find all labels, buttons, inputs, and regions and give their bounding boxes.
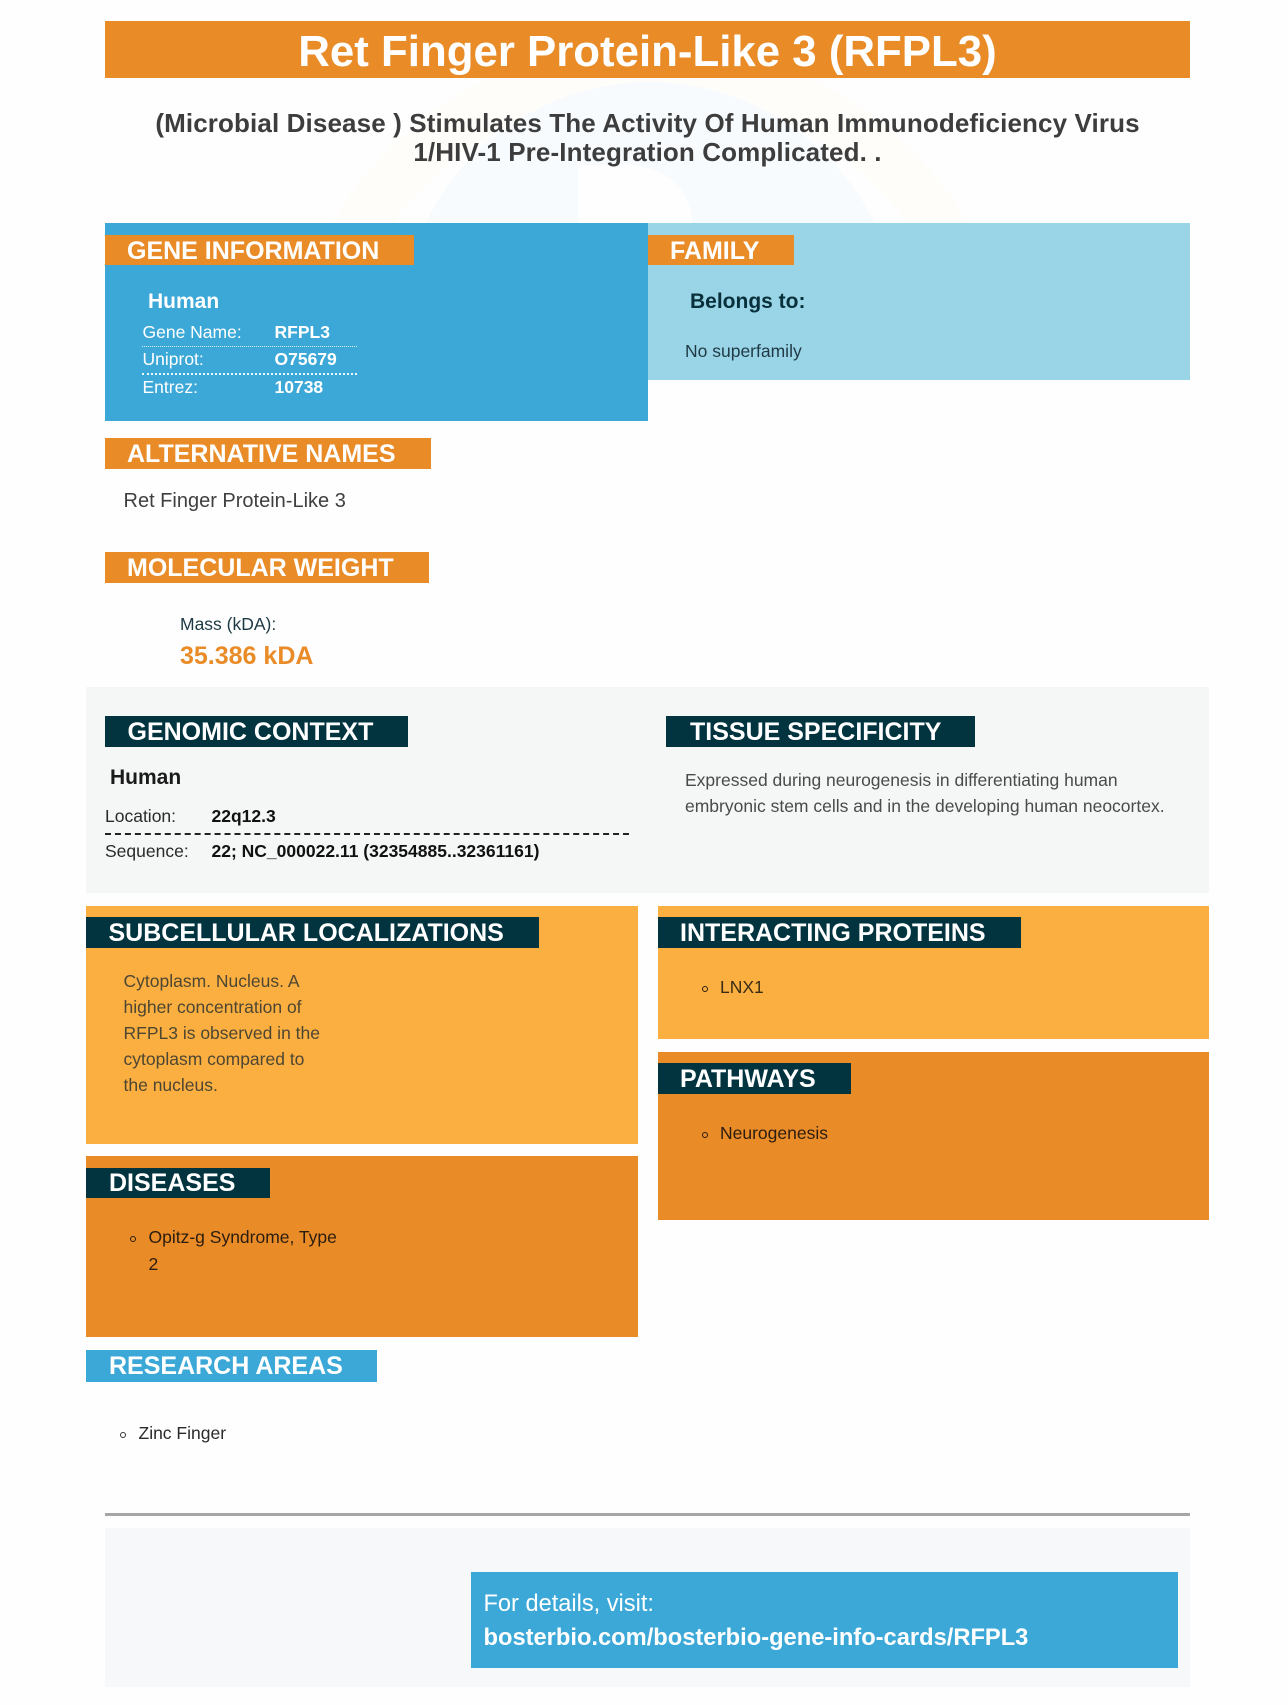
location value: 22q12.3 <box>212 806 276 826</box>
callout: details link: For details, visit: <box>484 1591 654 1617</box>
panel: pathways <box>658 1052 1209 1220</box>
gene identifiers table: Entrez: <box>142 377 198 397</box>
heading: pathways: PATHWAYS <box>680 1065 816 1093</box>
sequence value: 22; NC_000022.11 (32354885..32361161) <box>212 841 539 861</box>
localization text: higher concentration of <box>124 997 302 1017</box>
location row: Location: <box>105 806 176 826</box>
subtitle <box>155 108 1140 167</box>
panel: interacting proteins <box>658 906 1209 1039</box>
background watermark logo <box>0 0 1288 223</box>
sequence row: Sequence: <box>105 841 189 861</box>
gene identifiers table: O75679 <box>274 349 337 369</box>
pathways list: Neurogenesis <box>720 1123 828 1143</box>
belongs to label: Belongs to: <box>690 290 806 313</box>
heading: family <box>648 235 794 265</box>
heading: family: FAMILY <box>670 237 759 265</box>
title banner <box>105 21 1190 78</box>
heading: genomic context: GENOMIC CONTEXT <box>128 718 373 746</box>
species label: Human <box>148 290 219 313</box>
gene identifiers table: Gene Name: <box>142 322 242 342</box>
diseases list: Opitz-g Syndrome, Type <box>148 1227 337 1247</box>
panel: diseases <box>86 1156 638 1337</box>
diseases list <box>130 1227 337 1274</box>
heading: tissue specificity: TISSUE SPECIFICITY <box>690 718 941 746</box>
tissue specificity text: embryonic stem cells and in the developing human neocortex. <box>685 796 1165 816</box>
panel: footer <box>105 1528 1190 1687</box>
gene identifiers table <box>142 322 357 397</box>
panel: gene information <box>105 223 648 421</box>
interacting proteins list: LNX1 <box>720 977 764 997</box>
heading: alternative names: ALTERNATIVE NAMES <box>127 440 396 468</box>
species label: Human <box>110 766 181 788</box>
heading: diseases: DISEASES <box>109 1169 235 1197</box>
heading: gene information: GENE INFORMATION <box>127 237 379 265</box>
mass value: 35.386 kDA <box>180 642 313 670</box>
localization text <box>124 971 320 1095</box>
panel: family <box>648 223 1190 380</box>
panel: subcellular localizations <box>86 906 638 1144</box>
heading: molecular weight: MOLECULAR WEIGHT <box>127 554 394 582</box>
callout: details link: bosterbio.com/bosterbio-gene-info-cards/RFPL3 <box>484 1625 1028 1651</box>
alternative names text: Ret Finger Protein-Like 3 <box>124 490 346 512</box>
title banner: Ret Finger Protein-Like 3 (RFPL3) <box>298 27 997 76</box>
callout: details link <box>471 1572 1178 1668</box>
gene identifiers table: Uniprot: <box>142 349 204 369</box>
panel: genomic context and tissue specificity <box>86 687 1209 893</box>
heading: subcellular localizations: SUBCELLULAR LOCALIZATIONS <box>108 919 504 947</box>
mass label: Mass (kDA): <box>180 614 276 634</box>
localization text: RFPL3 is observed in the <box>124 1023 320 1043</box>
subtitle: 1/HIV-1 Pre-Integration Complicated. . <box>413 137 882 167</box>
localization text: cytoplasm compared to <box>124 1049 304 1069</box>
heading: interacting proteins: INTERACTING PROTEINS <box>680 919 986 947</box>
tissue specificity text: Expressed during neurogenesis in differentiating human <box>685 770 1118 790</box>
localization text: the nucleus. <box>124 1075 218 1095</box>
heading: pathways <box>658 1063 851 1094</box>
diseases list: 2 <box>148 1254 158 1274</box>
gene identifiers table: 10738 <box>274 377 323 397</box>
gene identifiers table: RFPL3 <box>274 322 330 342</box>
research areas list: Zinc Finger <box>138 1423 226 1443</box>
subtitle: (Microbial Disease ) Stimulates The Activity Of Human Immunodeficiency Virus <box>155 108 1140 138</box>
superfamily value: No superfamily <box>685 341 802 361</box>
tissue specificity text <box>685 770 1165 816</box>
heading: research areas: RESEARCH AREAS <box>109 1352 343 1380</box>
heading: diseases <box>86 1168 270 1198</box>
localization text: Cytoplasm. Nucleus. A <box>124 971 300 991</box>
